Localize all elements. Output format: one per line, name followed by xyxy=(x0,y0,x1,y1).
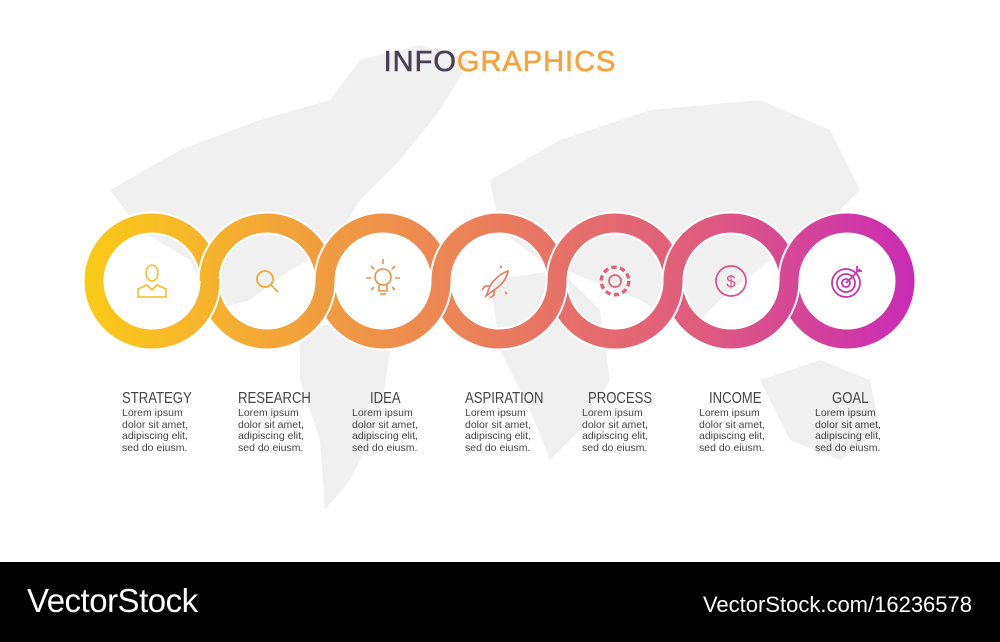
label: goal: Lorem ipsum xyxy=(815,407,876,419)
label: idea: IDEA xyxy=(370,390,401,407)
label: process: dolor sit amet, xyxy=(582,418,648,430)
label: idea: adipiscing elit, xyxy=(352,430,418,442)
label: aspiration: sed do eiusm. xyxy=(465,442,530,454)
label: strategy: adipiscing elit, xyxy=(122,430,188,442)
label: income: Lorem ipsum xyxy=(699,407,760,419)
footer id: VectorStock.com/16236578 xyxy=(703,592,972,617)
label: idea: sed do eiusm. xyxy=(352,442,417,454)
icon: rocket xyxy=(482,266,508,298)
icon: person xyxy=(138,265,166,297)
icon: bulb xyxy=(366,259,400,294)
label: process: sed do eiusm. xyxy=(582,442,647,454)
label: strategy xyxy=(122,390,192,454)
label: research xyxy=(238,390,311,454)
label: income: INCOME xyxy=(709,390,761,407)
label: aspiration: adipiscing elit, xyxy=(465,430,531,442)
footer logo: VectorStock xyxy=(27,582,198,619)
label: aspiration: dolor sit amet, xyxy=(465,418,531,430)
title: INFOGRAPHICS xyxy=(384,46,616,78)
label: goal: GOAL xyxy=(832,390,868,407)
label: process: Lorem ipsum xyxy=(582,407,643,419)
label: goal: dolor sit amet, xyxy=(815,418,881,430)
label: goal: adipiscing elit, xyxy=(815,430,881,442)
label: aspiration: ASPIRATION xyxy=(465,390,543,407)
label: process xyxy=(582,390,652,454)
label: process: PROCESS xyxy=(588,390,652,407)
label: income: adipiscing elit, xyxy=(699,430,765,442)
label: research: adipiscing elit, xyxy=(238,430,304,442)
label: strategy: Lorem ipsum xyxy=(122,407,183,419)
label: income xyxy=(699,390,765,454)
label: research: sed do eiusm. xyxy=(238,442,303,454)
icon: dollar: $ xyxy=(726,272,736,291)
label: research: dolor sit amet, xyxy=(238,418,304,430)
icon: magnifier xyxy=(257,271,278,292)
label: research: Lorem ipsum xyxy=(238,407,299,419)
label: goal: sed do eiusm. xyxy=(815,442,880,454)
label: goal xyxy=(815,390,881,454)
icon: dollar xyxy=(716,266,746,296)
icon: gear xyxy=(602,268,628,294)
label: strategy: STRATEGY xyxy=(122,390,192,407)
label: idea: Lorem ipsum xyxy=(352,407,413,419)
footer bar xyxy=(0,562,1000,642)
icon: target xyxy=(832,266,862,297)
label: income: sed do eiusm. xyxy=(699,442,764,454)
label: strategy: dolor sit amet, xyxy=(122,418,188,430)
label: idea xyxy=(352,390,418,454)
label: idea: dolor sit amet, xyxy=(352,418,418,430)
label: strategy: sed do eiusm. xyxy=(122,442,187,454)
label: aspiration xyxy=(465,390,543,454)
label: aspiration: Lorem ipsum xyxy=(465,407,526,419)
label: income: dolor sit amet, xyxy=(699,418,765,430)
label: process: adipiscing elit, xyxy=(582,430,648,442)
label: research: RESEARCH xyxy=(238,390,311,407)
